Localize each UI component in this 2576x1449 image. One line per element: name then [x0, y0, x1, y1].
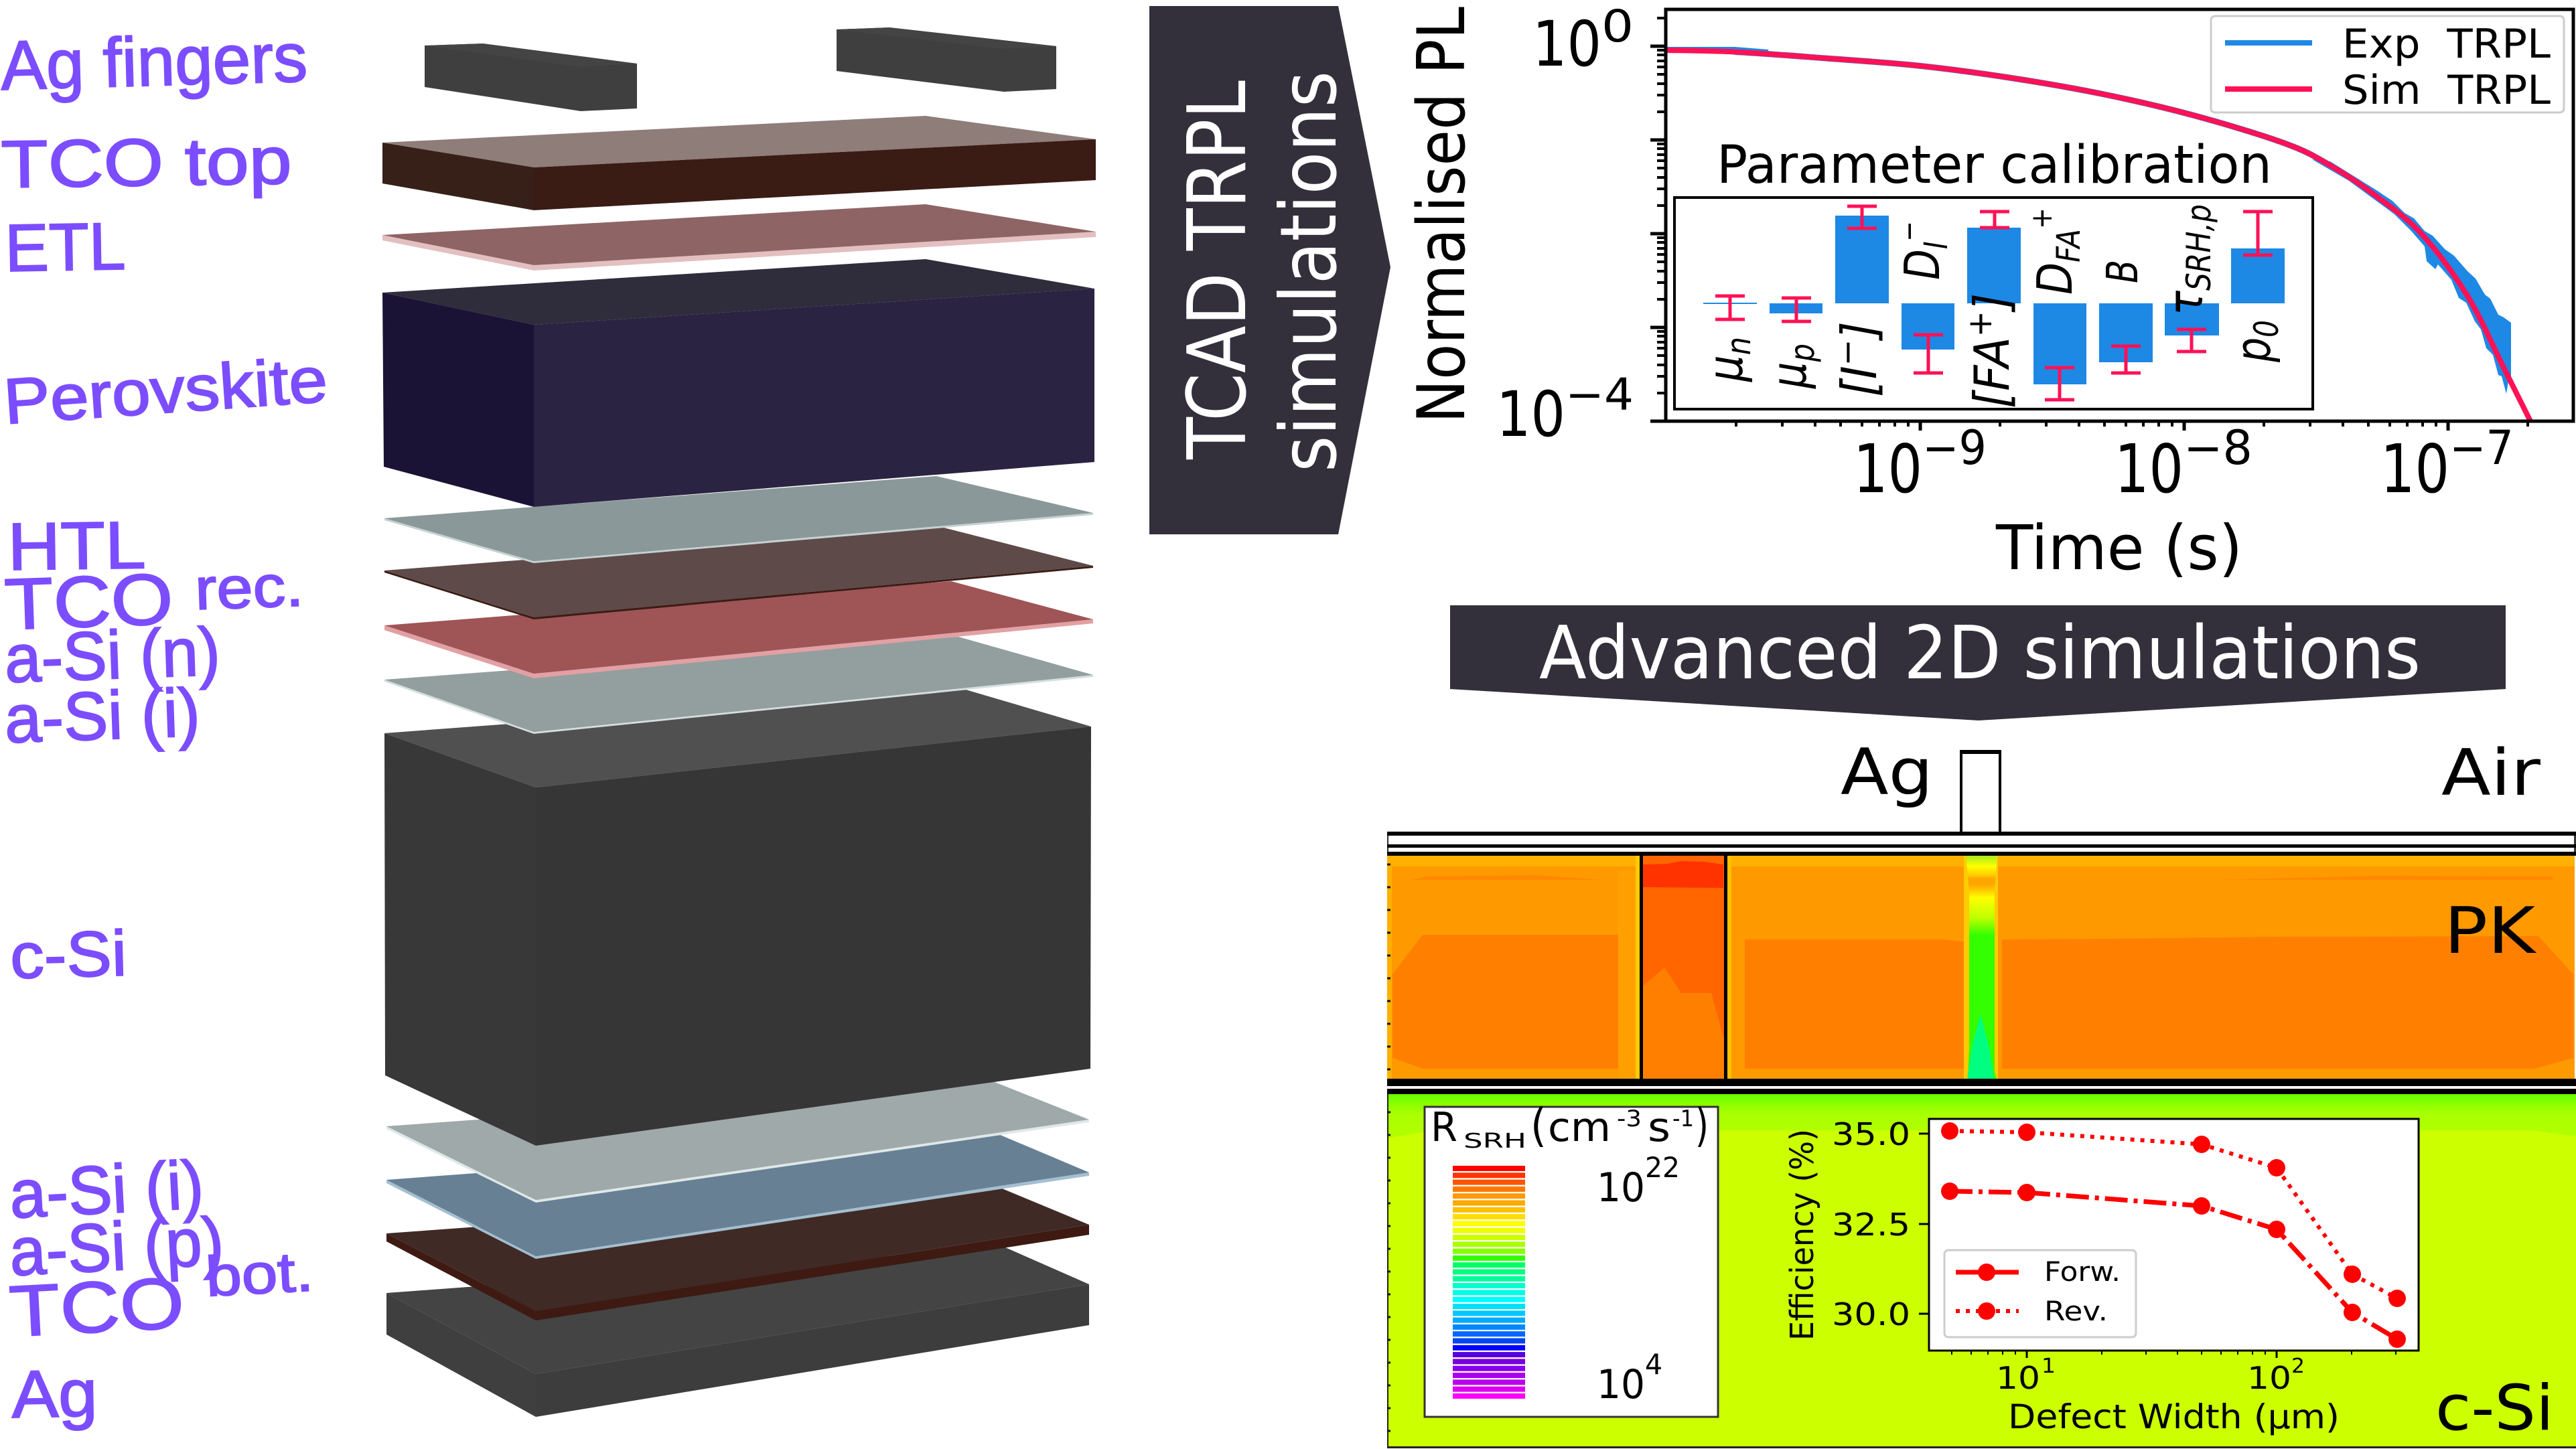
parameter labels: D — [1894, 243, 1950, 280]
scale label 10^4: 4 — [1645, 1348, 1662, 1381]
legend — [2211, 16, 2564, 114]
label: Perovskite: Perovskite — [1, 344, 330, 438]
parameter labels: − — [1892, 221, 1926, 241]
label: a-Si (i) lower: a-Si (i) — [7, 1146, 206, 1233]
text: simulations: simulations — [1264, 71, 1354, 472]
parameter labels: SRH,p — [2179, 204, 2218, 291]
plot frame and ticks — [1650, 9, 2573, 431]
perovskite SRH field — [1387, 854, 2576, 1079]
y tick label 10^0: 10 — [1532, 8, 1601, 81]
legend title: -1 — [1672, 1105, 1694, 1132]
y tick labels: 32.5 — [1832, 1207, 1910, 1243]
bars — [1703, 216, 2285, 384]
panel: exploded layer stack — [382, 27, 1096, 1417]
curve: Exp TRPL — [1666, 50, 2511, 394]
curve: Sim TRPL — [1666, 50, 2530, 421]
axis ticks — [1919, 1134, 2277, 1358]
banner: Advanced 2D simulations — [1450, 605, 2506, 720]
y axis title: Efficiency (%) — [1784, 1129, 1821, 1341]
layer: ETL — [382, 204, 1096, 271]
parameter labels: FA — [2050, 229, 2088, 262]
legend title: SRH — [1463, 1130, 1526, 1153]
layer: perovskite — [382, 259, 1094, 507]
label: Ag fingers: Ag fingers — [0, 19, 308, 105]
thin layers below perovskite — [1387, 1079, 2576, 1094]
parameter labels — [1697, 204, 2286, 408]
arrow: TCAD TRPL simulations — [1149, 6, 1390, 534]
label: a-Si (n): a-Si (n) — [3, 613, 222, 697]
parameter labels: μ — [1697, 351, 1754, 382]
label: c-Si: c-Si — [2435, 1372, 2554, 1445]
layer: c-Si — [384, 690, 1091, 1146]
legend: Exp TRPL — [2342, 21, 2551, 68]
scale label 10^22 — [1597, 1151, 1680, 1211]
scale label 10^22: 10 — [1597, 1164, 1645, 1211]
layer: TCO top — [382, 116, 1096, 210]
legend title: ( — [1530, 1099, 1547, 1152]
inset: parameter calibration bars — [1674, 198, 2313, 409]
label: TCO rec.: rec. — [194, 552, 305, 622]
series: forward scan — [1941, 1183, 2406, 1348]
label: Ag: Ag — [11, 1356, 98, 1432]
parameter labels: ] — [1831, 321, 1887, 341]
x tick label 10^-9: 10 — [1853, 430, 1922, 508]
layer: a-Si (i) upper — [384, 637, 1093, 734]
x tick label 10^-8: 10 — [2115, 430, 2184, 508]
chart: normalised PL versus time — [1404, 1, 2573, 584]
layer: a-Si (p) — [386, 1134, 1089, 1259]
label: TCO bot.: bot. — [204, 1239, 315, 1308]
series: reverse scan — [1941, 1122, 2406, 1307]
thin layers above perovskite — [1387, 832, 2576, 855]
icon: Ag finger left — [425, 44, 637, 111]
y tick label 10^-4: −4 — [1565, 369, 1634, 421]
label: PK: PK — [2444, 895, 2537, 968]
c-Si SRH field — [1387, 864, 2576, 1448]
x tick label 10^-7 — [2380, 421, 2514, 508]
parameter labels: [I — [1831, 364, 1887, 397]
legend title: R — [1431, 1104, 1457, 1151]
legend title: cm — [1548, 1104, 1611, 1151]
inset legend — [1944, 1250, 2136, 1337]
label: a-Si (p): a-Si (p) — [7, 1203, 226, 1290]
layer: TCO recombination — [384, 528, 1093, 619]
label: c-Si: c-Si — [9, 917, 127, 992]
x tick label 10^-9: −9 — [1922, 421, 1987, 475]
label: TCO bot.: TCO — [7, 1263, 164, 1352]
label: a-Si (i) upper: a-Si (i) — [3, 674, 202, 757]
label: TCO rec.: TCO — [3, 558, 159, 645]
colour stripes — [1453, 1166, 1525, 1399]
label: HTL: HTL — [7, 508, 146, 585]
parameter labels: + — [2025, 208, 2059, 229]
y tick label 10^-4: 10 — [1496, 378, 1565, 451]
legend title: s — [1648, 1104, 1670, 1151]
error bars — [1715, 206, 2273, 400]
x tick label 10^2 — [2247, 1355, 2305, 1396]
label: ETL: ETL — [4, 209, 126, 286]
layer labels — [0, 19, 330, 1432]
x tick label 10^1: 1 — [2042, 1355, 2056, 1378]
parameter labels: I — [1918, 241, 1955, 249]
x tick label 10^-7: 10 — [2380, 430, 2449, 508]
x tick label 10^-7: −7 — [2449, 421, 2514, 475]
Ag contact outline — [1960, 750, 2001, 833]
x tick label 10^2: 10 — [2247, 1360, 2291, 1396]
y tick labels: 35.0 — [1832, 1116, 1910, 1152]
legend title: ) — [1695, 1099, 1709, 1152]
inset legend: Rev. — [2044, 1296, 2108, 1327]
parameter labels: − — [1828, 339, 1867, 366]
icon: Ag finger right — [837, 27, 1056, 92]
x axis title: Time (s) — [1995, 512, 2242, 584]
banner text: Advanced 2D simulations — [1539, 610, 2421, 696]
scale label 10^22: 22 — [1645, 1151, 1680, 1184]
y tick labels: 30.0 — [1832, 1296, 1910, 1332]
parameter labels: τ — [2157, 287, 2214, 315]
y tick label 10^0: 0 — [1601, 1, 1634, 52]
inset legend: Forw. — [2044, 1257, 2121, 1288]
parameter labels: D — [2027, 258, 2083, 295]
layer: Ag bottom — [386, 1247, 1089, 1417]
text: TCAD TRPL: TCAD TRPL — [1171, 80, 1265, 460]
panel: 2D simulation map — [1387, 736, 2576, 1448]
x tick label 10^-9 — [1853, 421, 1987, 508]
scale label 10^4 — [1597, 1348, 1662, 1408]
y tick label 10^-4 — [1496, 369, 1634, 451]
label: Air: Air — [2441, 737, 2541, 810]
x tick label 10^-8: −8 — [2184, 421, 2252, 475]
legend: Sim TRPL — [2342, 67, 2551, 114]
parameter labels: p — [2225, 331, 2281, 362]
layer: HTL — [384, 476, 1093, 563]
parameter labels: μ — [1761, 358, 1817, 388]
x axis title: Defect Width (µm) — [2008, 1397, 2340, 1436]
layer: TCO bottom — [386, 1189, 1089, 1320]
parameter labels: [FA — [1964, 331, 2020, 408]
label: Ag: Ag — [1841, 736, 1933, 810]
scale label 10^4: 10 — [1597, 1361, 1645, 1408]
legend title: -3 — [1617, 1105, 1642, 1132]
x tick label 10^-8 — [2115, 421, 2252, 508]
parameter labels: n — [1719, 337, 1758, 355]
layer: a-Si (i) lower — [386, 1082, 1089, 1203]
parameter labels: 0 — [2247, 320, 2286, 337]
label: TCO top: TCO top — [1, 123, 292, 202]
parameter labels: ] — [1964, 293, 2020, 313]
x tick label 10^1 — [1996, 1355, 2056, 1396]
x tick label 10^2: 2 — [2291, 1355, 2305, 1378]
y tick labels — [1832, 1116, 1910, 1332]
parameter labels: B — [2098, 260, 2148, 283]
colour legend: R SRH — [1425, 1099, 1718, 1417]
legend title — [1431, 1099, 1709, 1153]
parameter labels: + — [1960, 311, 1999, 337]
layer: a-Si (n) — [384, 581, 1093, 678]
parameter labels: p — [1783, 344, 1822, 362]
heading: Parameter calibration: Parameter calibration — [1717, 135, 2272, 196]
x tick label 10^1: 10 — [1996, 1360, 2040, 1396]
inset chart: efficiency versus defect width — [1784, 1116, 2419, 1436]
